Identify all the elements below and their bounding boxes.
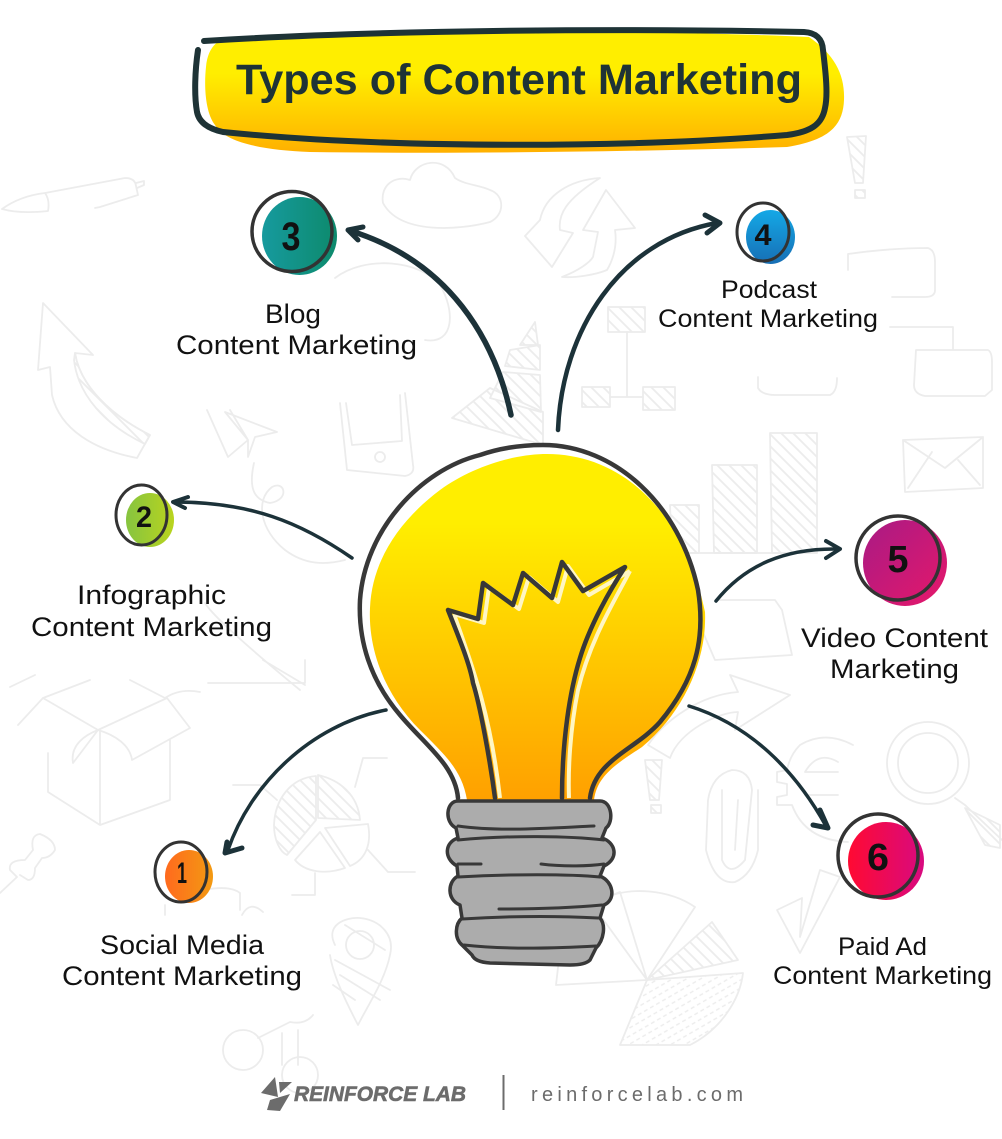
title banner — [195, 30, 844, 153]
marker 1 — [155, 842, 213, 903]
divider — [502, 1075, 504, 1110]
marker 2: 2 — [136, 501, 152, 534]
label: podcast: Content Marketing — [658, 305, 878, 333]
website: reinforcelab.com — [531, 1084, 743, 1106]
marker 6 — [838, 814, 924, 900]
label: blog: Blog — [265, 299, 321, 329]
marker 5: 5 — [888, 539, 908, 581]
arrow to video — [716, 541, 840, 601]
arrow to blog — [348, 227, 511, 415]
base thread lines — [458, 826, 604, 948]
arrow to social media — [225, 710, 386, 853]
label: podcast — [658, 276, 878, 333]
screw base — [447, 801, 614, 965]
filament highlight — [454, 566, 630, 798]
marker 2 — [116, 485, 174, 547]
label: infographic — [31, 580, 272, 642]
label: social media — [62, 930, 302, 991]
bulb glass outline — [360, 445, 700, 798]
label: social media: Content Marketing — [62, 961, 302, 991]
logo mark — [261, 1077, 292, 1111]
label: podcast: Podcast — [721, 276, 817, 304]
label: blog: Content Marketing — [176, 330, 417, 360]
label: blog — [176, 299, 417, 360]
marker 1: 1 — [177, 857, 187, 890]
arrow to paid ad — [689, 706, 828, 828]
footer logo and url — [261, 1075, 743, 1111]
arrow to podcast — [558, 215, 720, 430]
label: paid ad — [773, 933, 992, 990]
marker 4: 4 — [754, 219, 772, 252]
label: infographic: Infographic — [77, 580, 226, 610]
marker 4 — [737, 203, 795, 264]
label: paid ad: Content Marketing — [773, 962, 992, 990]
bulb glass fill — [370, 454, 705, 800]
title: Types of Content Marketing — [236, 56, 802, 104]
label: paid ad: Paid Ad — [838, 933, 927, 961]
label: video: Video Content — [801, 623, 989, 653]
marker 6: 6 — [867, 837, 889, 879]
light bulb — [360, 445, 705, 965]
banner fill — [205, 31, 844, 153]
marker 5 — [856, 516, 947, 606]
marker 3 — [252, 192, 337, 275]
label: social media: Social Media — [100, 930, 265, 960]
arrow to infographic — [173, 497, 352, 558]
marker 3: 3 — [282, 215, 300, 259]
brand name: REINFORCE LAB — [294, 1083, 466, 1106]
banner outline — [195, 30, 826, 145]
label: video — [801, 623, 989, 684]
label: infographic: Content Marketing — [31, 612, 272, 642]
label: video: Marketing — [830, 654, 959, 684]
filament — [448, 562, 625, 798]
